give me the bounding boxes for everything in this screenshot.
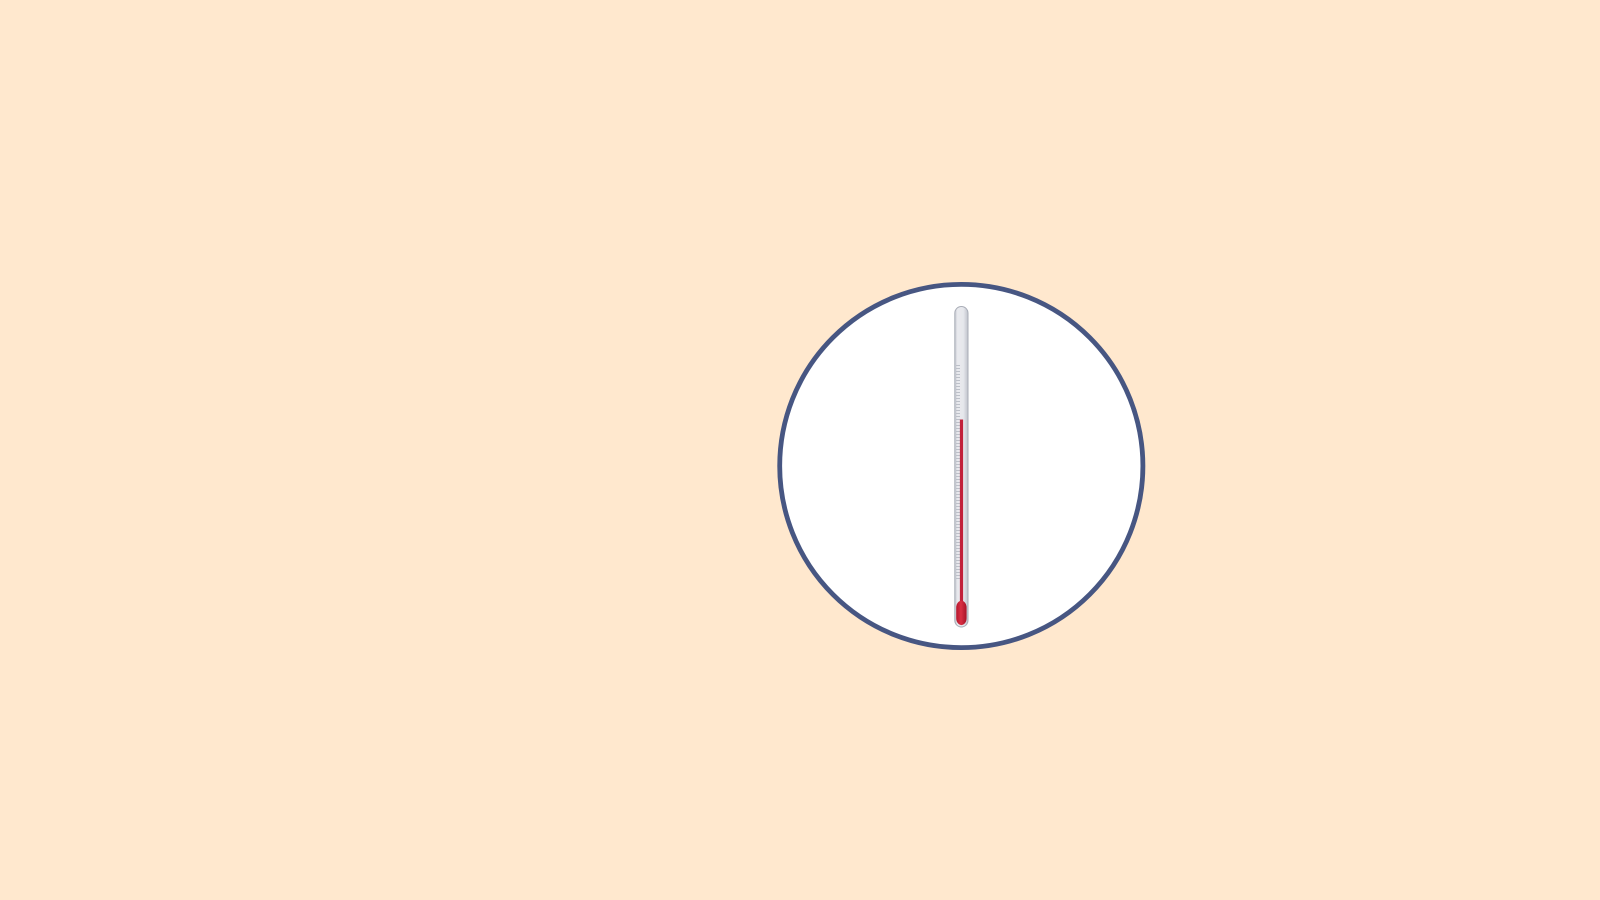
panel: circular frame — [780, 284, 1143, 648]
thermometer scale ticks — [955, 365, 969, 580]
red mercury bulb — [956, 601, 967, 625]
icon: thermometer — [955, 306, 969, 627]
thermometer glass tube — [955, 306, 968, 627]
red mercury column — [960, 420, 963, 604]
